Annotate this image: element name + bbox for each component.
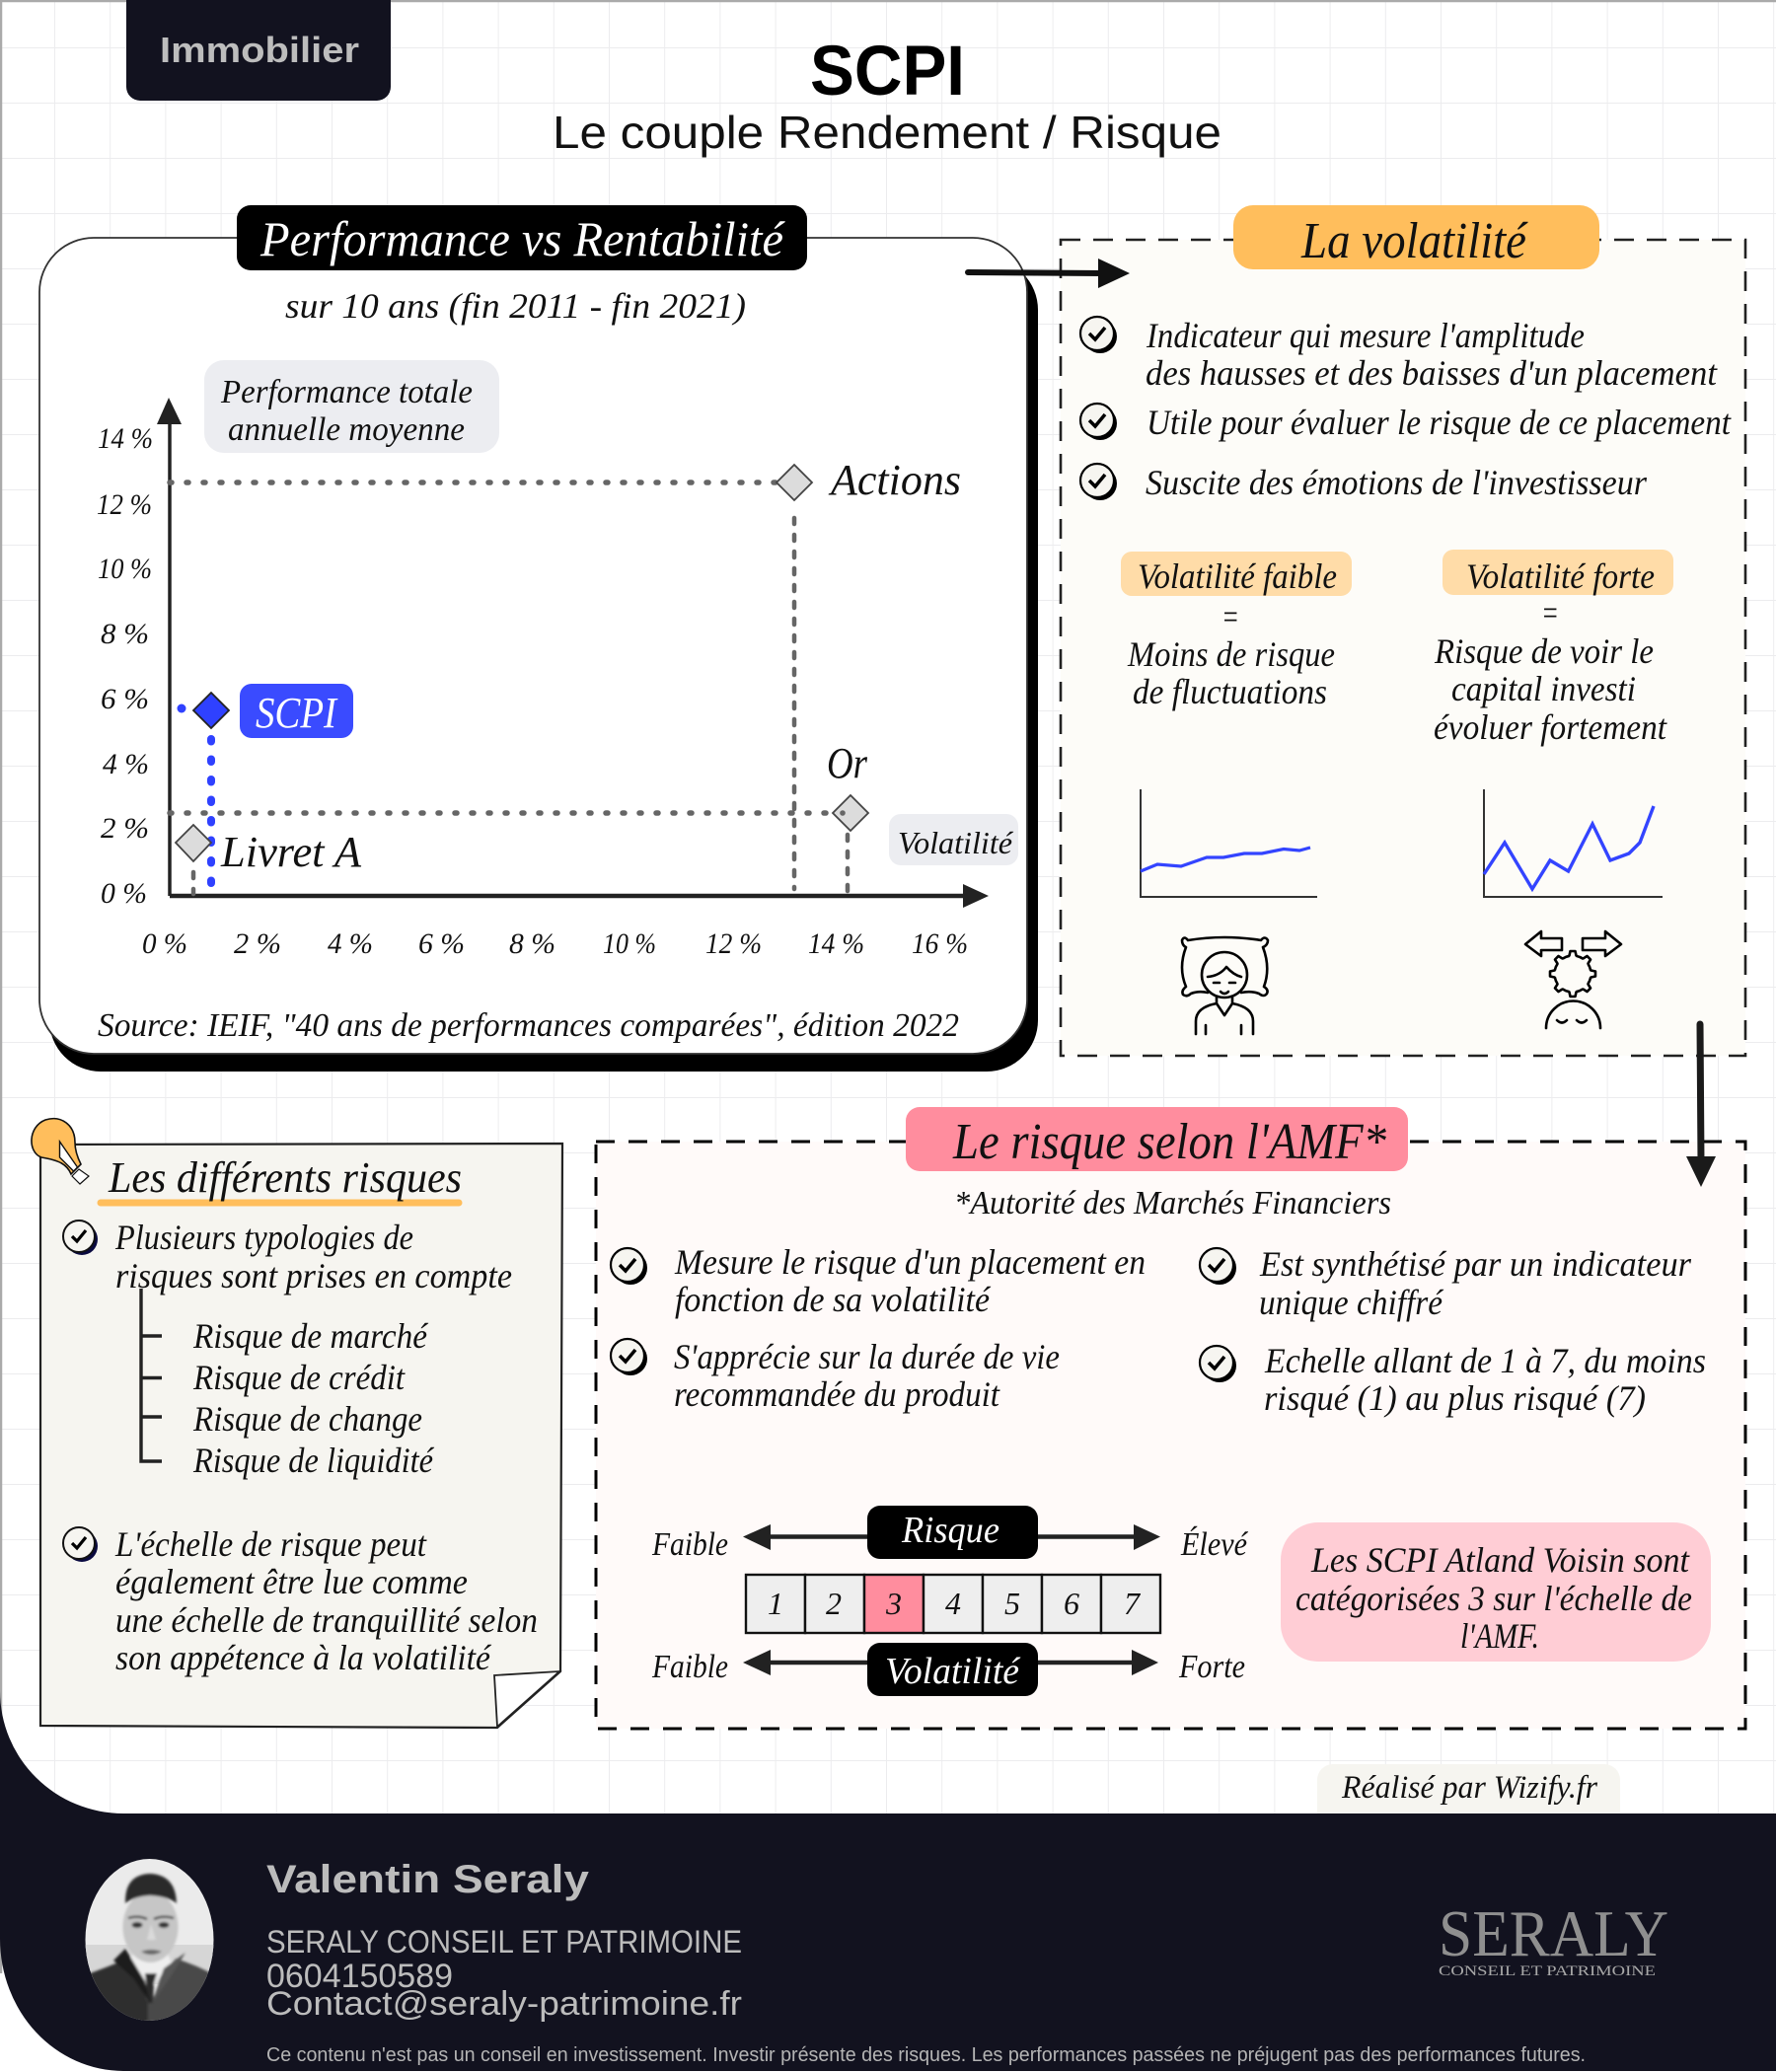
y axis title <box>204 360 499 453</box>
x axis labels: 0 % <box>142 927 187 960</box>
x axis labels <box>142 927 968 960</box>
description: forte: = <box>1541 593 1559 632</box>
source note: Source: IEIF, "40 ans de performances comparées", édition 2022 <box>98 1007 959 1044</box>
description: forte: évoluer fortement <box>1434 707 1667 747</box>
y axis title: Performance totale <box>220 374 473 410</box>
scale cells 1 to 7: 7 <box>1124 1586 1142 1621</box>
logo: Seraly: CONSEIL ET PATRIMOINE <box>1439 1963 1656 1979</box>
note paper <box>40 1144 562 1728</box>
icon: stressed head with arrows and gear <box>1525 931 1621 1028</box>
tag: volatilité faible: Volatilité faible <box>1138 556 1337 596</box>
bullet: échelle 1 à 7: risqué (1) au plus risqué (7) <box>1264 1378 1646 1418</box>
bullet: échelle 1 à 7: Echelle allant de 1 à 7, du moins <box>1264 1341 1706 1380</box>
y axis labels: 2 % <box>101 812 149 845</box>
panel heading: Le risque selon l'AMF* <box>952 1114 1386 1170</box>
x axis labels: 6 % <box>418 927 465 960</box>
risk arrow: Élevé <box>1180 1526 1249 1563</box>
period subtitle: sur 10 ans (fin 2011 - fin 2021) <box>285 286 746 326</box>
description: faible: Moins de risque <box>1127 634 1335 674</box>
description: forte: Risque de voir le <box>1434 631 1654 671</box>
scale cells 1 to 7: 2 <box>826 1586 842 1621</box>
bullet: durée de vie <box>611 1337 1060 1414</box>
bullet: échelle de tranquillité: également être lue comme <box>115 1562 468 1601</box>
risk tree: Risque de marché <box>192 1316 429 1356</box>
point: SCPI <box>193 684 353 738</box>
x axis <box>170 884 989 908</box>
y axis labels: 10 % <box>98 553 152 585</box>
bullet 3: Suscite des émotions de l'investisseur <box>1146 463 1648 502</box>
y axis <box>157 398 182 896</box>
title: SCPI <box>810 33 965 111</box>
description: faible <box>1127 597 1335 711</box>
x axis labels: 12 % <box>705 927 762 960</box>
risk tree: Risque de crédit <box>192 1358 406 1397</box>
bullet: typologies: Plusieurs typologies de <box>114 1218 413 1257</box>
bullet 2: Utile pour évaluer le risque de ce placement <box>1147 403 1732 442</box>
description: forte <box>1434 593 1667 747</box>
bullet: échelle de tranquillité: une échelle de tranquillité selon <box>115 1600 538 1640</box>
chart: low volatility <box>1141 789 1317 897</box>
panel card <box>39 238 1027 1054</box>
panel heading: Performance vs Rentabilité <box>259 211 785 266</box>
x axis labels: 10 % <box>603 927 656 960</box>
bullet: durée de vie: recommandée du produit <box>674 1374 1000 1414</box>
credit tag: Wizify: Réalisé par Wizify.fr <box>1341 1770 1597 1806</box>
callout: SCPI Atland Voisin: Les SCPI Atland Voisin sont <box>1310 1540 1690 1580</box>
panel: performance vs rentabilité <box>39 205 1038 1072</box>
point: Livret A: Livret A <box>220 828 362 876</box>
panel heading <box>1233 205 1599 269</box>
description: faible: de fluctuations <box>1133 672 1327 711</box>
scatter chart <box>97 360 1018 960</box>
advisor contact details <box>266 1924 742 2023</box>
bullet: typologies <box>63 1218 512 1295</box>
advisor contact details: Contact@seraly-patrimoine.fr <box>266 1985 742 2023</box>
panel: les différents risques <box>32 1119 562 1728</box>
scale cells 1 to 7: 6 <box>1064 1586 1079 1621</box>
bullet: indicateur unique: unique chiffré <box>1259 1283 1444 1322</box>
y axis labels: 12 % <box>97 488 152 521</box>
y axis labels: 14 % <box>98 422 153 455</box>
bullet: indicateur unique <box>1200 1244 1692 1322</box>
arrow: performance to volatilité <box>968 259 1130 288</box>
risk arrow: Faible <box>651 1526 728 1563</box>
volatility arrow: Faible <box>651 1649 728 1685</box>
risk tree: Risque de change <box>192 1399 422 1439</box>
risk label: Risque <box>901 1510 999 1551</box>
panel: le risque selon l'AMF <box>596 1107 1745 1729</box>
volatility arrow <box>651 1649 1245 1685</box>
portrait photo <box>85 1859 213 2021</box>
y axis labels: 6 % <box>101 683 149 715</box>
category tag: Immobilier <box>126 0 391 101</box>
description: faible: = <box>1221 597 1239 636</box>
y axis title: annuelle moyenne <box>228 411 465 448</box>
disclaimer: Ce contenu n'est pas un conseil en investissement. Investir présente des risques. Les performances passées ne préjugent pas des performances futures. <box>266 2044 1586 2066</box>
y axis labels <box>97 422 153 910</box>
credit tag: Wizify <box>1317 1764 1620 1813</box>
x axis title <box>889 814 1018 865</box>
bullet: mesure le risque: Mesure le risque d'un placement en <box>674 1242 1146 1282</box>
x axis labels: 16 % <box>912 927 968 960</box>
risk tree: Risque de liquidité <box>192 1441 435 1480</box>
advisor contact details: SERALY CONSEIL ET PATRIMOINE <box>266 1924 742 1960</box>
bullet: mesure le risque <box>611 1242 1146 1319</box>
icon: sleeping person <box>1182 937 1268 1034</box>
scale cells 1 to 7: 1 <box>768 1586 783 1621</box>
bullet: typologies: risques sont prises en compte <box>115 1256 512 1295</box>
volatility label <box>867 1643 1038 1696</box>
footer band <box>0 1691 1776 2071</box>
scale cells 1 to 7 <box>746 1575 1160 1633</box>
scale cells 1 to 7: 4 <box>945 1586 961 1621</box>
point: Or <box>827 739 868 831</box>
bullet: mesure le risque: fonction de sa volatilité <box>675 1280 992 1319</box>
subtitle: Le couple Rendement / Risque <box>553 107 1221 158</box>
column: volatilité forte <box>1434 550 1673 1028</box>
bullet 1: des hausses et des baisses d'un placement <box>1146 353 1718 393</box>
bullet: durée de vie: S'apprécie sur la durée de vie <box>674 1337 1060 1376</box>
panel: la volatilité <box>1061 205 1745 1056</box>
point: Or: Or <box>827 739 868 787</box>
y axis labels: 8 % <box>101 618 149 650</box>
callout: SCPI Atland Voisin <box>1281 1522 1711 1662</box>
scale cells 1 to 7: 3 <box>885 1586 902 1621</box>
chart: high volatility <box>1484 789 1663 897</box>
advisor contact details: 0604150589 <box>266 1958 453 1995</box>
risk arrow <box>651 1524 1249 1563</box>
panel heading: Les différents risques <box>108 1153 462 1202</box>
bullet: échelle 1 à 7 <box>1200 1341 1706 1418</box>
x axis labels: 2 % <box>234 927 281 960</box>
folded corner <box>494 1671 559 1727</box>
category tag: Immobilier: Immobilier <box>160 30 359 70</box>
scale cells 1 to 7: 5 <box>1004 1586 1020 1621</box>
description: forte: capital investi <box>1451 669 1636 708</box>
bullet: indicateur unique: Est synthétisé par un indicateur <box>1259 1244 1692 1284</box>
x axis labels: 4 % <box>328 927 373 960</box>
bullet: échelle de tranquillité <box>63 1524 538 1677</box>
risk scale <box>651 1506 1249 1696</box>
icon: light bulb <box>32 1119 89 1184</box>
risk label <box>867 1506 1038 1559</box>
risk tree <box>141 1289 435 1480</box>
bullet: échelle de tranquillité: son appétence à la volatilité <box>115 1638 492 1677</box>
x axis labels: 14 % <box>808 927 864 960</box>
column: volatilité faible <box>1121 552 1352 1034</box>
y axis labels: 4 % <box>103 748 149 780</box>
footnote: AMF: *Autorité des Marchés Financiers <box>954 1185 1391 1221</box>
point: Actions: Actions <box>828 456 961 504</box>
callout: SCPI Atland Voisin: l'AMF. <box>1460 1616 1539 1656</box>
logo: Seraly: SERALY <box>1439 1897 1668 1970</box>
x axis title: Volatilité <box>898 825 1014 860</box>
volatility arrow: Forte <box>1178 1649 1245 1685</box>
x axis labels: 8 % <box>509 927 555 960</box>
tag: volatilité forte: Volatilité forte <box>1466 556 1655 596</box>
panel shadow <box>49 259 1038 1072</box>
point: SCPI: SCPI <box>256 689 338 737</box>
advisor name: Valentin Seraly <box>266 1858 590 1901</box>
bullet 1: Indicateur qui mesure l'amplitude <box>1146 316 1585 355</box>
panel heading: La volatilité <box>1300 213 1528 269</box>
y axis labels: 0 % <box>101 877 147 910</box>
arrow: volatilité to AMF <box>1686 1024 1716 1187</box>
bullet: échelle de tranquillité: L'échelle de risque peut <box>114 1524 427 1564</box>
volatility label: Volatilité <box>885 1651 1021 1692</box>
callout: SCPI Atland Voisin: catégorisées 3 sur l'échelle de <box>1295 1579 1692 1618</box>
bullet 1 <box>1080 316 1718 393</box>
